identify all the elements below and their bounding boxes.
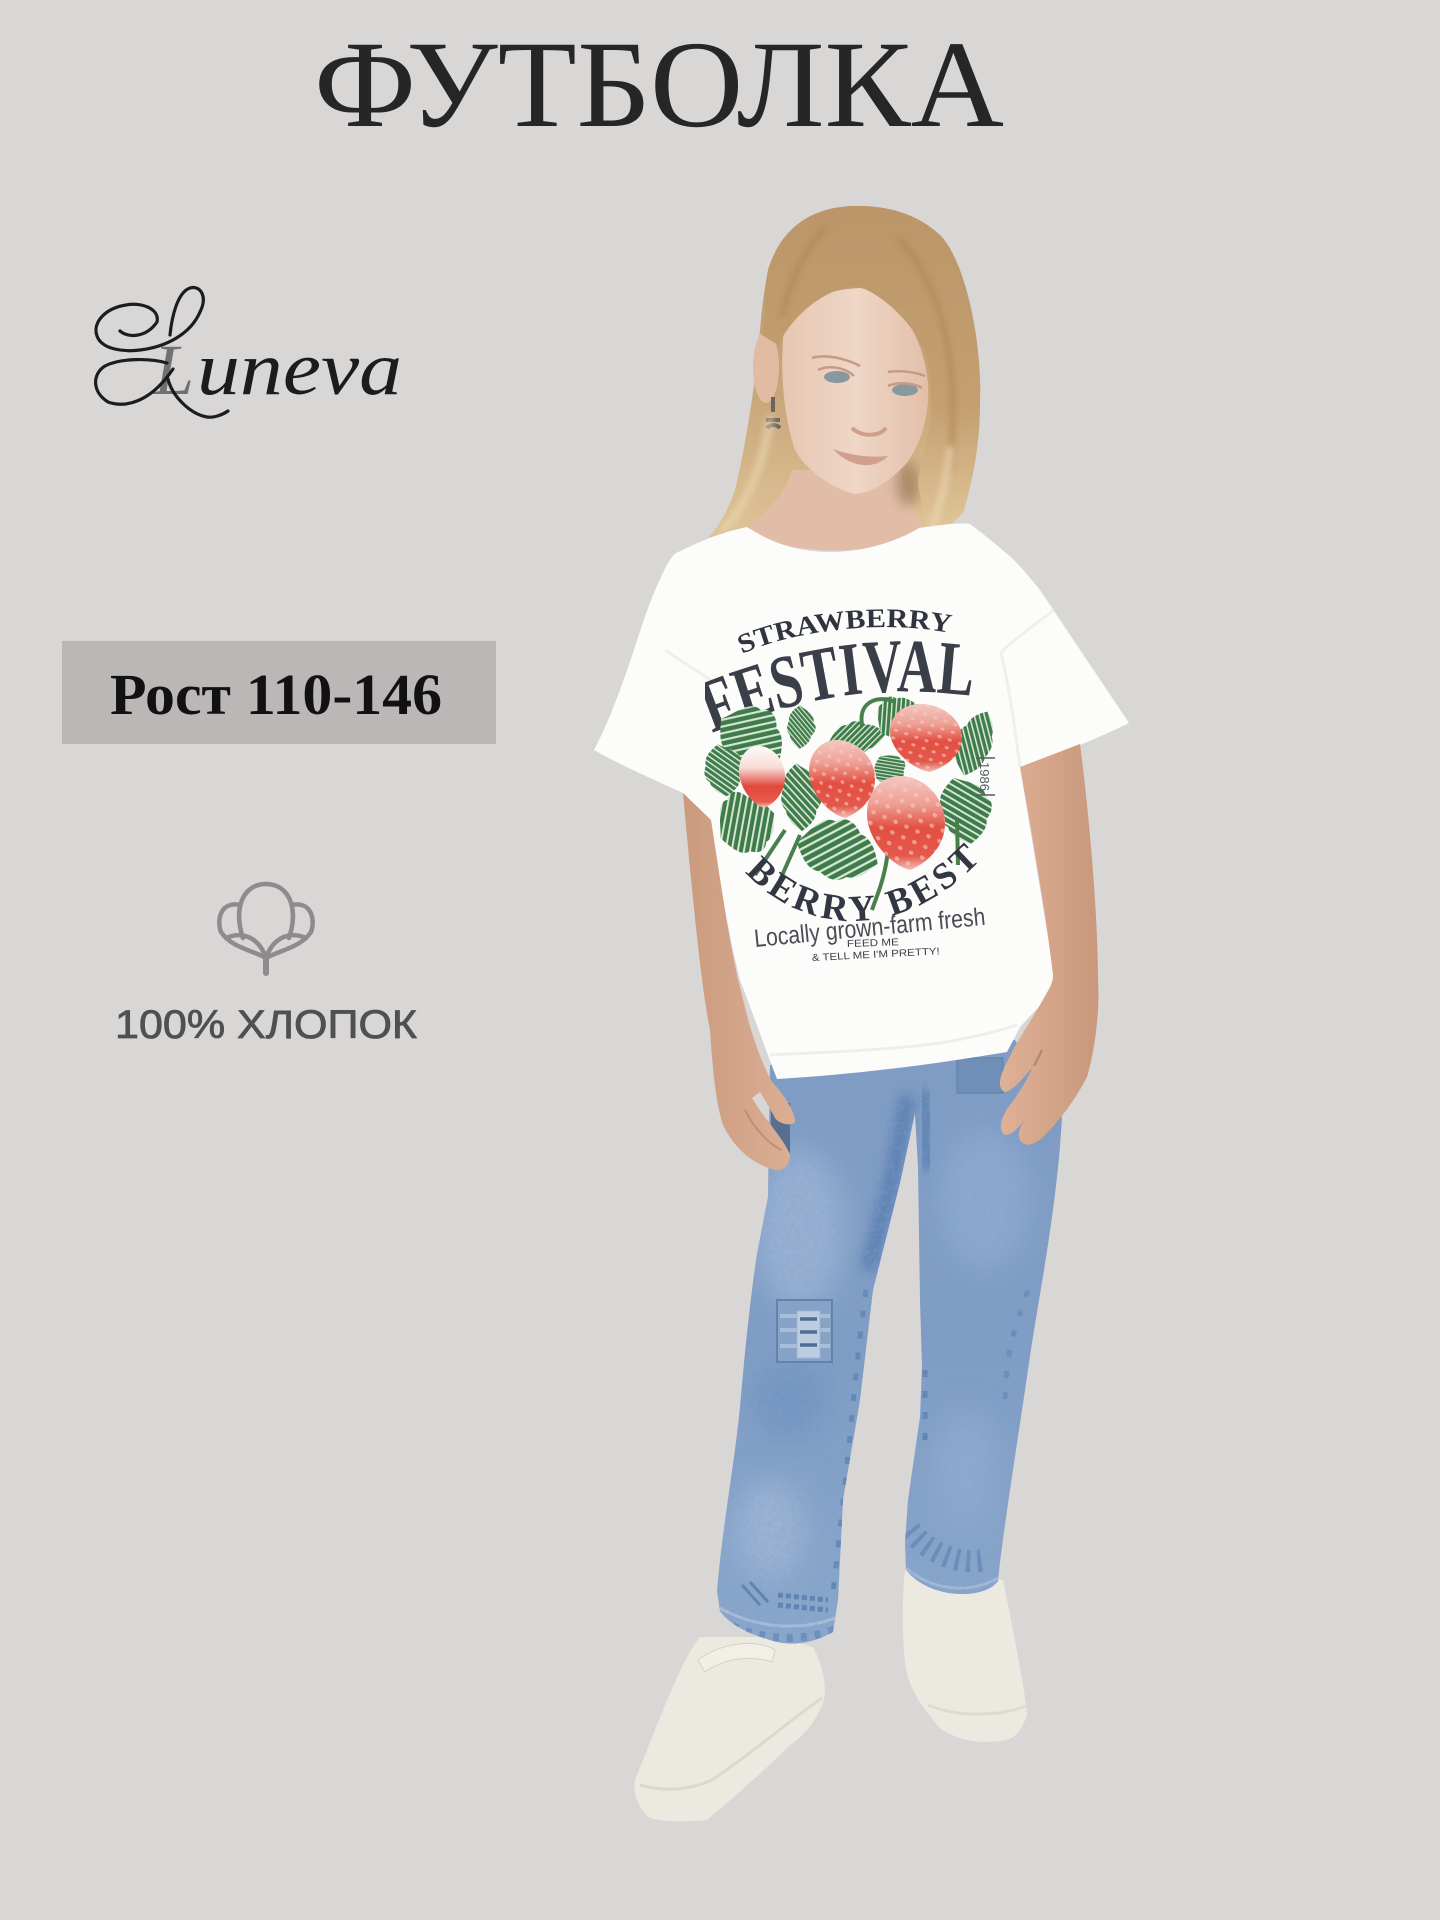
- logo: Luneva: [96, 288, 402, 417]
- neck: [745, 470, 925, 551]
- print: small text: [812, 937, 940, 964]
- print: leaves: [700, 685, 1002, 890]
- ear: [753, 331, 779, 403]
- material label: 100% ХЛОПОК: [115, 1003, 418, 1047]
- print: STRAWBERRY: [742, 627, 955, 654]
- side tag: [771, 1103, 790, 1153]
- print: 1986 tag: [976, 758, 995, 795]
- t-shirt: [594, 523, 1129, 1079]
- shadow under hair: [896, 462, 920, 506]
- print: FESTIVAL: [705, 641, 972, 732]
- size panel: [62, 641, 496, 744]
- eyes: [812, 356, 925, 396]
- shoe left: [634, 1637, 825, 1821]
- print: FESTIVAL: FESTIVAL: [705, 641, 972, 732]
- print: tagline: Locally grown-farm fresh: [753, 903, 987, 953]
- figure: girl in t-shirt and jeans: [594, 206, 1129, 1822]
- t-shirt: BERRY BEST: [745, 842, 977, 922]
- print: small text: FEED ME: [847, 937, 899, 950]
- logo: Luneva: uneva: [197, 327, 402, 411]
- left arm and hand: [683, 793, 795, 1170]
- print: small text: & TELL ME I'M PRETTY!: [812, 946, 940, 964]
- back hair: [708, 206, 980, 545]
- icon: cotton boll: [219, 884, 313, 973]
- hair streaks: [725, 228, 953, 545]
- shoe right: [903, 1570, 1027, 1742]
- t-shirt: STRAWBERRY: [738, 609, 952, 653]
- front hair: [762, 206, 980, 545]
- mouth: [833, 449, 888, 465]
- right arm and hand: [1000, 744, 1098, 1145]
- size panel: Рост 110-146: [110, 662, 442, 727]
- print: 1986 tag: 1986: [977, 762, 992, 791]
- face: [782, 288, 928, 494]
- jeans knee patch: [777, 1300, 832, 1362]
- print: BERRY BEST: [745, 855, 985, 921]
- print: strawberries: [739, 704, 962, 870]
- print: stems: [755, 699, 958, 910]
- logo: Luneva: L: [153, 330, 194, 410]
- earring: [766, 397, 780, 428]
- nose: [852, 428, 886, 435]
- jeans: [717, 1040, 1062, 1644]
- title: ФУТБОЛКА: [314, 16, 1004, 153]
- jeans pocket tag: [957, 1058, 1003, 1093]
